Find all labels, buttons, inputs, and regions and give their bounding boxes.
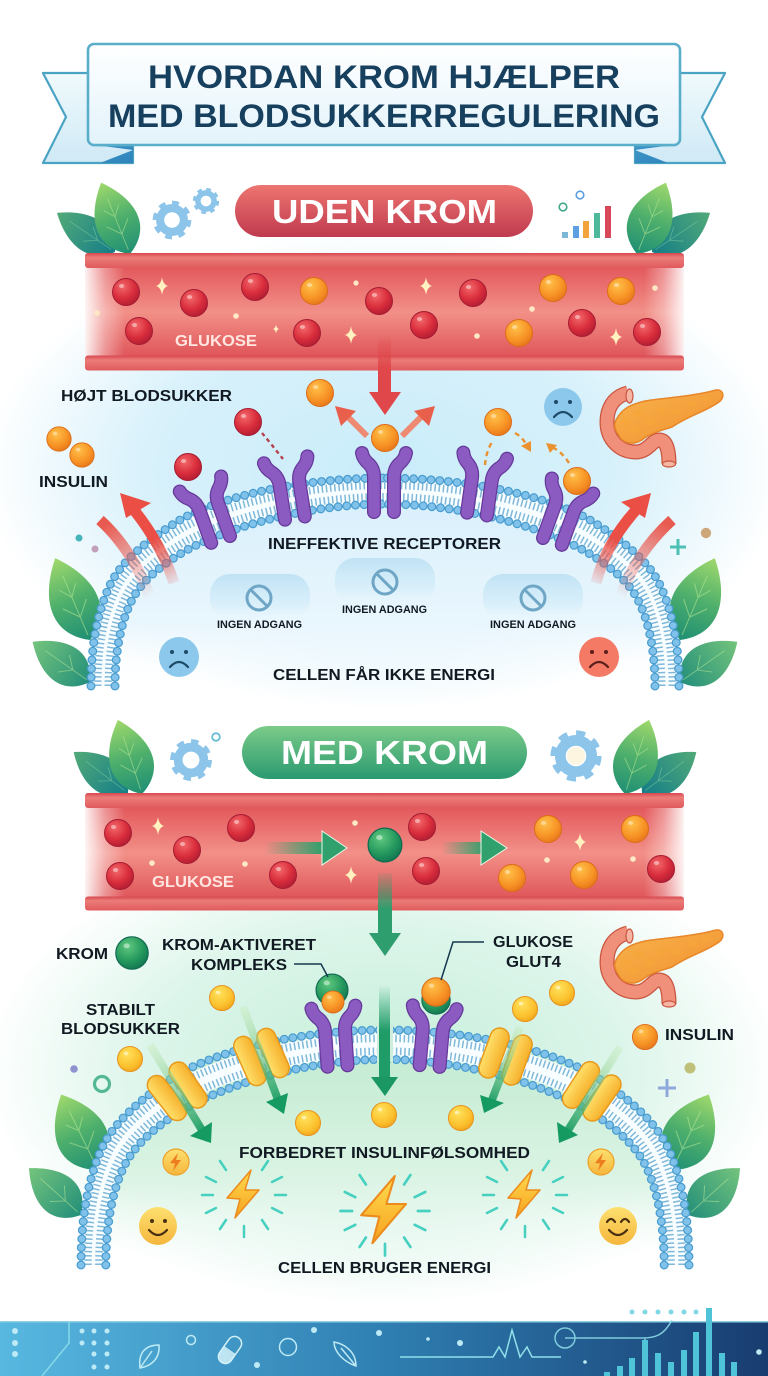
membrane gap: [377, 1024, 393, 1062]
no-access box right: INGEN ADGANG: [490, 619, 576, 631]
arrow: green diagonal 3: [480, 1027, 520, 1113]
sparkles: [149, 817, 636, 884]
title line 2: MED BLODSUKKERREGULERING: [108, 98, 660, 134]
footer circuit lines: [42, 1320, 672, 1376]
label: krom-aktiveret kompleks: KROM-AKTIVERET: [162, 937, 317, 954]
arrow: green diagonal 2: [243, 1007, 288, 1114]
cell membrane: [81, 1030, 689, 1265]
face: smile left: [139, 1207, 177, 1245]
glucose molecules: [104, 814, 674, 892]
face: smile right: [599, 1207, 637, 1245]
label: krom-aktiveret kompleks: [162, 937, 317, 974]
pancreas top: [607, 389, 723, 467]
arrow: green right 2: [442, 831, 507, 865]
label: højt blodsukker: HØJT BLODSUKKER: [61, 388, 232, 405]
ribbon left fold: [88, 144, 133, 163]
no-access box centre: [335, 558, 435, 616]
glucose molecules: [112, 274, 660, 346]
ribbon right tail: [635, 73, 725, 163]
arrows: red deflected: [335, 406, 435, 436]
footer capsule: [216, 1334, 244, 1366]
label: cellen bruger energi: CELLEN BRUGER ENERGI: [278, 1260, 491, 1277]
insulin receptors: [180, 453, 593, 549]
pancreas lower: [607, 929, 723, 1007]
ribbon left tail: [43, 73, 133, 163]
label: krom: KROM: [56, 946, 108, 963]
icon: gears: [156, 190, 217, 236]
sparkles: [94, 277, 658, 346]
energy: small right coin: [588, 1149, 614, 1175]
arrow: green diagonal 4: [557, 1047, 620, 1143]
no-access box left: INGEN ADGANG: [217, 619, 302, 631]
cell membrane: [91, 478, 679, 686]
heading pill: uden krom: UDEN KROM: [272, 193, 497, 230]
footer top dots: [630, 1310, 698, 1314]
leaves lower left: [15, 1083, 121, 1230]
label: ineffektive receptorer: INEFFEKTIVE RECEPTORER: [268, 536, 501, 553]
leaves top left: [63, 713, 163, 807]
title banner: [43, 44, 725, 163]
no-access box centre: INGEN ADGANG: [342, 604, 427, 616]
title line 1: HVORDAN KROM HJÆLPER: [148, 59, 620, 95]
arrow: green down: [369, 873, 401, 956]
label: glukose glut4: GLUKOSE: [493, 934, 573, 951]
arrow: red dashed: [262, 433, 283, 459]
label: forbedret insulinfølsomhed: FORBEDRET INSULINFØLSOMHED: [239, 1145, 530, 1162]
leaves top right: [604, 713, 707, 807]
glucose yellow molecules: [118, 980, 574, 1136]
decorative marks left: [70, 1065, 110, 1092]
footer bar chart: [604, 1308, 737, 1376]
face: sad blue top: [544, 388, 582, 426]
energy: bolt left: [202, 1161, 286, 1237]
heading pill: med krom: MED KROM: [281, 734, 488, 771]
arrows: orange dashed: [485, 433, 569, 465]
leader line: glukose glut4: [441, 942, 484, 980]
energy: small left coin: [163, 1149, 189, 1175]
label: cellen får ikke energi: CELLEN FÅR IKKE ENERGI: [273, 665, 495, 684]
energy: bolt right: [483, 1161, 567, 1237]
leader line: kompleks: [294, 964, 328, 977]
cell interior: [81, 1030, 689, 1265]
leaves lower right: [658, 549, 749, 698]
label: stabilt blodsukker: BLODSUKKER: [61, 1021, 180, 1038]
legend: chromium ball: [116, 937, 148, 969]
icon: small bar chart: [559, 191, 611, 238]
leaves lower left: [21, 549, 112, 698]
footer icons: [140, 1336, 356, 1368]
face: sad red: [579, 637, 619, 677]
label: glukose glut4: [493, 934, 573, 971]
arrow: green diagonal 1: [150, 1045, 212, 1143]
label: insulin: INSULIN: [39, 474, 108, 491]
arrow: red up left: [100, 493, 174, 597]
leaves top left: [47, 175, 150, 266]
label: glukose: GLUKOSE: [175, 333, 257, 350]
label: glukose: GLUKOSE: [152, 874, 234, 891]
decorative marks right: [670, 528, 711, 555]
label: stabilt blodsukker: STABILT: [86, 1002, 156, 1019]
leaves lower right: [649, 1083, 754, 1230]
ribbon right fold: [635, 144, 680, 163]
blood vessel: [85, 253, 684, 370]
leaves top right: [617, 175, 720, 266]
panel: med krom: [0, 713, 768, 1376]
arrow: red down: [369, 335, 401, 415]
chromium complex on receptor: [316, 974, 348, 1013]
footer band: [0, 1308, 768, 1376]
GLUT4 channels: [144, 1025, 625, 1125]
receptors with complexes: [311, 1005, 457, 1068]
heading pill: uden krom: [235, 185, 533, 237]
icon: gear right: [555, 735, 597, 777]
no-access box left: [210, 574, 310, 631]
background glow: without chromium: [0, 225, 768, 715]
insulin and glucose molecules: [47, 380, 591, 494]
arrow: centre green: [371, 985, 398, 1096]
face: sad blue bottom: [159, 637, 199, 677]
decorative marks right: [658, 1062, 696, 1097]
icon: gear left: [173, 733, 220, 778]
arrow: red up right: [596, 493, 672, 597]
label: krom-aktiveret kompleks: KOMPLEKS: [191, 957, 287, 974]
background glow: with chromium: [0, 830, 768, 1310]
energy: bolt centre: [340, 1175, 430, 1256]
label: glukose glut4: GLUT4: [506, 954, 561, 971]
footer ECG line: [400, 1330, 561, 1357]
blood vessel: [85, 793, 684, 910]
cell interior: [91, 478, 679, 686]
label: stabilt blodsukker: [61, 1002, 180, 1038]
arrow: green right 1: [265, 831, 347, 865]
footer dots: [12, 1327, 762, 1370]
arrowheads: orange: [521, 441, 557, 453]
legend: insulin ball: [632, 1024, 658, 1050]
label: insulin: INSULIN: [665, 1027, 734, 1044]
heading pill: med krom: [242, 726, 527, 779]
decorative dots left: [76, 534, 98, 552]
no-access box right: [483, 574, 583, 631]
chromium molecule: [368, 828, 402, 862]
glucose on GLUT4 receptor: [422, 978, 450, 1014]
banner plate: [88, 44, 680, 145]
